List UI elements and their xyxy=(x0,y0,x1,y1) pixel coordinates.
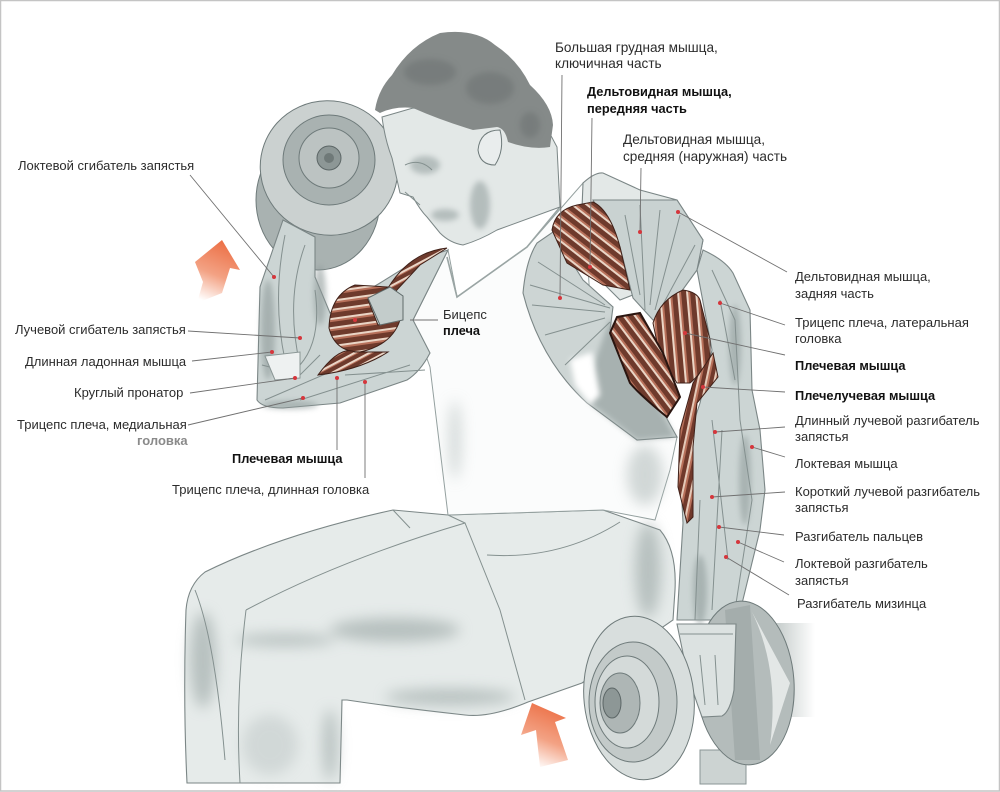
label: deltoid rear xyxy=(795,269,931,301)
upper dumbbell xyxy=(241,81,417,270)
muscle: biceps right xyxy=(610,313,680,417)
label: brachialis right: Плечевая мышца xyxy=(795,358,906,373)
muscle: brachioradialis right xyxy=(678,353,718,523)
figure: pectoral and lat area xyxy=(523,232,677,440)
label: pectoralis clavicular xyxy=(555,40,718,71)
label: extensor carpi radialis longus: Длинный лучевой разгибатель xyxy=(795,413,980,428)
head and neck xyxy=(382,108,560,245)
label: anconeus: Локтевая мышца xyxy=(795,456,898,471)
muscle marker dots xyxy=(270,210,754,559)
label: biceps xyxy=(443,307,487,338)
label: brachioradialis: Плечелучевая мышца xyxy=(795,388,936,403)
label: triceps medial head: головка xyxy=(137,433,188,448)
label: extensor carpi ulnaris: запястья xyxy=(795,573,849,588)
label: deltoid middle xyxy=(623,132,787,164)
label: extensor carpi radialis longus: запястья xyxy=(795,429,849,444)
label: extensor carpi radialis brevis: Короткий лучевой разгибатель xyxy=(795,484,980,499)
label: triceps medial head xyxy=(17,417,188,448)
muscle: brachialis right xyxy=(653,290,710,383)
muscle: biceps tendon top xyxy=(388,248,447,292)
label: extensor digitorum: Разгибатель пальцев xyxy=(795,529,923,544)
label: wrist flexor radial: Лучевой сгибатель запястья xyxy=(15,322,186,337)
label: extensor digiti minimi: Разгибатель мизинца xyxy=(797,596,927,611)
figure: seated legs xyxy=(185,510,675,783)
figure: hanging arm xyxy=(677,250,765,625)
hair xyxy=(375,32,553,148)
figure: vest torso xyxy=(413,183,677,520)
label: wrist flexor ulnar: Локтевой сгибатель запястья xyxy=(18,158,194,173)
label: extensor carpi ulnaris: Локтевой разгибатель xyxy=(795,556,928,571)
label: extensor carpi radialis brevis: запястья xyxy=(795,500,849,515)
label: palmaris longus: Длинная ладонная мышца xyxy=(25,354,187,369)
label: triceps lateral head: Трицепс плеча, латеральная xyxy=(795,315,969,330)
arrow: upper left xyxy=(195,240,240,303)
label: deltoid middle: средняя (наружная) часть xyxy=(623,149,787,164)
label: biceps: плеча xyxy=(443,323,481,338)
muscle: biceps left xyxy=(329,285,400,352)
label: deltoid rear: Дельтовидная мышца, xyxy=(795,269,931,284)
label: triceps lateral head: головка xyxy=(795,331,842,346)
label: deltoid middle: Дельтовидная мышца, xyxy=(623,132,765,147)
biceps aponeurosis patch xyxy=(368,287,403,325)
leader lines xyxy=(188,75,789,595)
label: deltoid front: Дельтовидная мышца, xyxy=(587,84,732,99)
label: triceps medial head: Трицепс плеча, медиальная xyxy=(17,417,187,432)
label: extensor carpi radialis brevis xyxy=(795,484,980,515)
bench behind lower dumbbell xyxy=(700,623,815,784)
label: deltoid rear: задняя часть xyxy=(795,286,874,301)
muscle: anterior deltoid xyxy=(552,202,630,290)
label: triceps long head: Трицепс плеча, длинная головка xyxy=(172,482,370,497)
label: pectoralis clavicular: ключичная часть xyxy=(555,56,662,71)
lower dumbbell rear plate xyxy=(690,598,800,768)
muscle: brachialis left xyxy=(318,351,388,375)
figure: deltoid xyxy=(593,200,703,320)
label: extensor carpi ulnaris xyxy=(795,556,928,588)
arrow: lower xyxy=(521,703,568,767)
label: triceps lateral head xyxy=(795,315,969,346)
label: extensor carpi radialis longus xyxy=(795,413,980,444)
figure: curled arm xyxy=(257,220,448,409)
label: pectoralis clavicular: Большая грудная мышца, xyxy=(555,40,718,55)
hand gripping xyxy=(677,624,736,717)
label: pronator teres: Круглый пронатор xyxy=(74,385,183,400)
label: brachialis left: Плечевая мышца xyxy=(232,451,343,466)
figure: trapezius and shoulder top xyxy=(580,173,703,300)
label: deltoid front xyxy=(587,84,732,116)
label: biceps: Бицепс xyxy=(443,307,487,322)
label: deltoid front: передняя часть xyxy=(587,101,687,116)
lower dumbbell front plate xyxy=(576,611,702,785)
